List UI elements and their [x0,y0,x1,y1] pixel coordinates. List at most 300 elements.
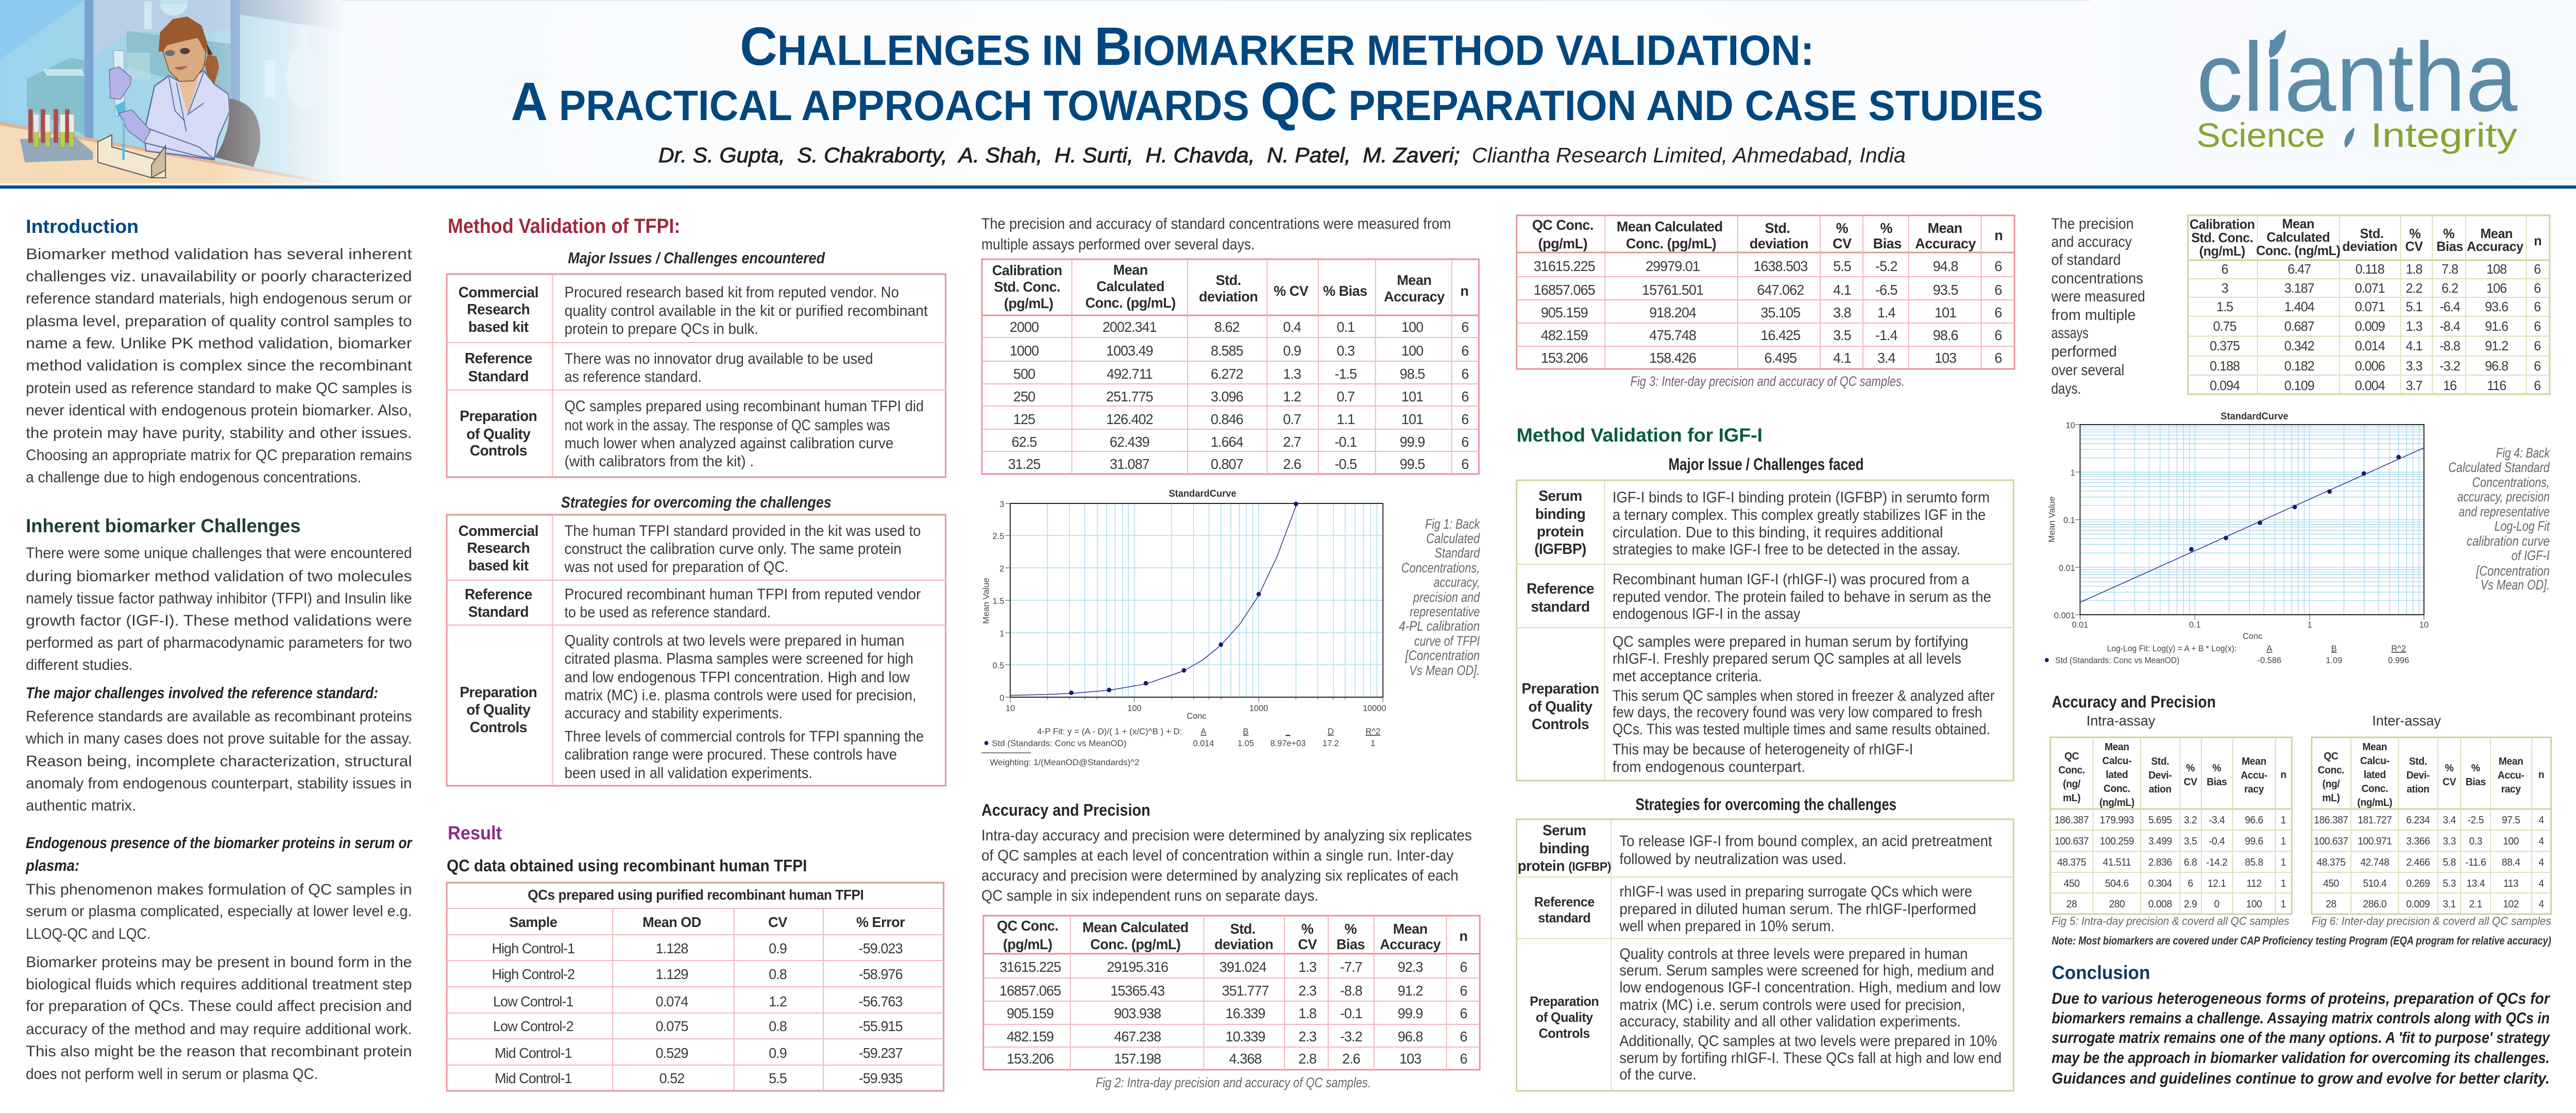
table: IGF-I calibration standards: 0.006 [2355,359,2385,374]
table: QC data: CV [768,914,788,930]
table: intra-assay IGF-I: 41.511 [2103,857,2131,868]
table: inter-day TFPI QC: 3.4 [1877,350,1895,366]
table: intra-assay IGF-I: lated [2106,769,2128,781]
chart: TFPI 4-PL standard curve: 3 [999,499,1004,509]
table: TFPI calibration standards: 2000 [1010,319,1039,335]
panel: column 1 introduction and challenges [25,215,413,1083]
table: inter-assay IGF-I: 3.1 [2443,899,2456,910]
table: inter-assay IGF-I: 450 [2323,878,2339,889]
table: intra-assay IGF-I: 1 [2281,836,2286,847]
table: intra-assay IGF-I: 0 [2214,899,2219,910]
table: inter-assay IGF-I: ation [2406,784,2429,795]
caption: figure 4: calibration curve [2467,533,2550,549]
table: intra-assay IGF-I: 2.9 [2184,899,2197,910]
text block: endogenous presence: LLOQ-QC and LQC. [26,925,150,942]
table: IGF-I calibration standards: 1.8 [2406,262,2422,277]
table: TFPI strategies [447,515,945,786]
table: intra-assay IGF-I: 3.2 [2184,815,2197,826]
table: inter-day TFPI QC: Accuracy [1915,235,1976,251]
text block: introduction [26,246,412,486]
heading: Accuracy and Precision: Accuracy and Precision [981,801,1150,819]
text block: inherent challenges: growth factor (IGF-I). These method validations were [26,612,412,629]
chart: TFPI 4-PL standard curve: R^2 [1366,727,1380,736]
table: TFPI strategies: been used in all validation experiments. [565,765,812,782]
logo: Cliantha Science Integrity: Science [2196,116,2325,154]
table: intra-assay IGF-I: racy [2244,784,2264,795]
table: TFPI strategies: Commercial [459,523,538,539]
illustration: scientist pipetting in a lab [0,0,342,185]
table: inter-day TFPI QC: Conc. (pg/mL) [1626,235,1716,251]
table: IGF-I issues: protein [1537,524,1584,540]
table: inter-assay IGF-I: 4 [2538,878,2544,889]
table: inter-assay IGF-I: % [2445,763,2453,774]
table: intra-assay IGF-I: (ng/ [2063,779,2081,790]
table: TFPI calibration standards: (pg/mL) [1004,295,1053,311]
caption: figure 1: representative [1410,604,1480,619]
caption: figure 4: Calculated Standard [2448,460,2550,475]
table: intra-assay IGF-I: QC [2064,751,2079,762]
logo: Cliantha Science Integrity: cliantha [2196,22,2517,132]
table: TFPI calibration standards: 6 [1461,411,1469,427]
table: TFPI strategies: of Quality [466,702,531,718]
table: IGF-I calibration standards: 5.1 [2406,300,2422,314]
table: intra-day TFPI QC: 6 [1460,959,1467,975]
table: inter-day TFPI QC: 6 [1994,327,2002,343]
table: TFPI issues: protein to prepare QCs in bulk. [565,321,758,338]
table: TFPI strategies: accuracy and stability experiments. [565,705,783,722]
table: intra-day TFPI QC: n [1459,928,1467,944]
table: inter-day TFPI QC: 16857.065 [1534,282,1595,298]
table: inter-day TFPI QC: -1.4 [1875,327,1897,343]
text block: inherent challenges: namely tissue factor pathway inhibitor (TFPI) and Insulin like [26,590,412,607]
table: inter-assay IGF-I: 181.727 [2358,815,2392,826]
caption: figure 4: [Concentration [2476,563,2550,579]
table: intra-assay IGF-I: 1 [2281,857,2286,868]
chart: IGF-I log-log standard curve: 1 [2307,620,2312,630]
table: TFPI strategies: and low endogenous TFPI concentration. High and low [565,669,910,686]
table: inter-assay IGF-I: 510.4 [2363,878,2387,889]
table: inter-assay IGF-I: 0.269 [2406,878,2430,889]
table: IGF-I calibration standards: Calibration [2190,217,2255,232]
table: inter-assay IGF-I: -2.5 [2468,815,2484,826]
table: IGF-I calibration standards: 6 [2534,281,2541,296]
text block: endogenous presence: Biomarker proteins may be present in bound form in the [26,954,412,971]
table: intra-assay IGF-I: 12.1 [2208,878,2226,889]
table: intra-assay IGF-I: 0.008 [2148,899,2172,910]
table: TFPI calibration standards: n [1460,283,1468,299]
table: TFPI strategies: Standard [468,604,529,620]
table: intra-assay IGF-I: 100 [2246,899,2262,910]
chart: TFPI 4-PL standard curve: 0 [999,693,1004,703]
table: IGF-I strategies: To release IGF-I from bound complex, an acid pretreatment [1619,833,1992,850]
table: TFPI calibration standards: 251.775 [1106,389,1153,404]
table: inter-day TFPI QC: 6 [1994,305,2002,321]
table: TFPI calibration standards: 1.2 [1283,389,1301,404]
table: TFPI calibration standards: 6 [1461,434,1469,450]
table: intra-day TFPI QC: 1.8 [1298,1005,1317,1021]
table: inter-day TFPI QC: 1638.503 [1753,258,1808,274]
table: intra-assay IGF-I: 1 [2281,815,2286,826]
table: QC data: Mean OD [642,914,701,930]
text block: standard precision intro: The precision and accuracy of standard concentrations were measured from [981,215,1451,232]
table: IGF-I calibration standards: 3.7 [2406,379,2422,393]
table: TFPI calibration standards: 250 [1013,389,1036,404]
table: inter-assay IGF-I: 5.3 [2443,878,2456,889]
table: intra-assay IGF-I: mL) [2063,792,2080,804]
table: QC data: Low Control-1 [493,993,573,1009]
table: inter-day TFPI QC: 29979.01 [1646,258,1700,274]
table: inter-assay IGF-I: (ng/ [2323,779,2340,790]
caption: figure 1: [Concentration [1405,648,1480,663]
caption: figure 1: Calculated [1426,531,1480,546]
table: inter-day TFPI QC: 103 [1935,350,1957,366]
text block: introduction: challenges viz. unavailability or poorly characterized [26,268,412,285]
table: TFPI issues: not work in the assay. The response of QC samples was [565,417,890,434]
table: IGF-I calibration standards: 0.014 [2355,339,2385,353]
table: IGF-I calibration standards: 0.004 [2355,379,2385,393]
table: TFPI strategies: based kit [468,558,529,574]
table: TFPI strategies: citrated plasma. Plasma samples were screened for high [565,650,913,667]
table: intra-assay IGF-I: 1 [2281,899,2286,910]
table: QC data: 0.9 [769,1045,787,1061]
table: IGF-I issues: from endogenous counterpart. [1613,758,1805,775]
table: intra-assay IGF-I: 280 [2109,899,2125,910]
table: IGF-I calibration standards: 3.187 [2284,281,2314,296]
table: IGF-I issues: reputed vendor. The protein failed to behave in serum as the [1613,588,1991,605]
text block: accuracy and precision: QC sample in six independent runs on separate days. [981,887,1318,904]
table: IGF-I calibration standards: 0.071 [2355,300,2385,314]
table: intra-day TFPI QC: 482.159 [1007,1028,1054,1044]
authors and affiliation [658,143,1906,167]
table: inter-day TFPI QC: 475.748 [1649,327,1697,343]
text block: endogenous presence: Endogenous presence of the biomarker proteins in serum or [26,834,413,852]
table: intra-day TFPI QC: 92.3 [1398,959,1423,975]
chart: TFPI 4-PL standard curve: 2 [999,564,1004,574]
table: QC data: -55.915 [859,1018,903,1034]
table: inter-assay IGF-I: 97.5 [2502,815,2520,826]
chart: IGF-I log-log standard curve: Std (Standards: Conc vs MeanOD) [2055,655,2179,665]
table: intra-day TFPI QC: 2.3 [1298,1028,1317,1044]
table: IGF-I calibration standards: Std. [2360,227,2383,241]
chart: IGF-I log-log standard curve: 0.1 [2189,620,2201,630]
text block: endogenous presence: plasma: [25,857,79,874]
table: TFPI calibration standards: Mean [1113,262,1148,278]
table: IGF-I strategies: accuracy, stability and all other validation experiments. [1619,1013,1961,1030]
table: intra-day TFPI QC: (pg/mL) [1003,936,1052,952]
table: QC data: -59.237 [859,1045,903,1061]
table: IGF-I issues: binding [1535,506,1585,522]
table: inter-assay IGF-I: 0.3 [2469,836,2482,847]
table: intra-day TFPI QC: % [1301,921,1313,937]
table: IGF-I calibration standards: 6 [2534,339,2541,353]
table: IGF-I calibration standards: 0.009 [2355,319,2385,334]
table: inter-day TFPI QC: Bias [1873,235,1902,251]
table: TFPI issues [447,274,945,477]
table: inter-day TFPI QC: 1.4 [1877,305,1895,321]
text block: accuracy and precision: Intra-day accuracy and precision were determined by analyzing six replicates [981,827,1472,844]
table: intra-day TFPI QC: 903.938 [1114,1005,1161,1021]
table: inter-day TFPI QC: Mean Calculated [1617,218,1723,234]
table: QC data: -58.976 [859,966,903,982]
table: IGF-I calibration standards: 1.404 [2284,300,2314,314]
table: IGF-I calibration standards: 0.342 [2284,339,2314,353]
table: IGF-I calibration standards: % [2443,227,2455,241]
title: A PRACTICAL APPROACH TOWARDS QC PREPARATION AND CASE STUDIES [511,71,2043,131]
table: inter-day TFPI QC: -5.2 [1875,258,1897,274]
table: IGF-I calibration standards: 6 [2534,379,2541,393]
table: inter-assay IGF-I: Mean [2363,741,2387,753]
table: TFPI strategies: The human TFPI standard provided in the kit was used to [565,522,921,539]
text block: IGF-I standard precision intro: were measured [2051,288,2145,305]
table: IGF-I calibration standards: 4.1 [2406,339,2422,353]
table: intra-assay IGF-I: -3.4 [2209,815,2225,826]
table: TFPI calibration standards: 0.9 [1283,343,1301,359]
table: IGF-I issues: Preparation [1522,681,1599,697]
table: inter-day TFPI QC: 98.6 [1933,327,1958,343]
table: IGF-I strategies: binding [1539,840,1589,857]
table: intra-assay IGF-I [2050,737,2292,914]
text block: IGF-I standard precision intro: The precision [2051,215,2134,232]
table: TFPI calibration standards: 126.402 [1106,411,1153,427]
table: IGF-I strategies: Additionally, QC samples at two levels were prepared in 10% [1619,1033,1997,1050]
table: IGF-I strategies: Preparation [1530,994,1599,1009]
table: IGF-I issues: rhIGF-I. Freshly prepared serum QC samples at all levels [1613,650,1961,667]
authors and affiliation: Dr. S. Gupta, S. Chakraborty, A. Shah, H. Surti, H. Chavda, N. Patel, M. Zaveri; [658,143,1460,167]
table: inter-assay IGF-I: 4 [2538,857,2544,868]
table: IGF-I issues: This may be because of heterogeneity of rhIGF-I [1613,741,1913,758]
table: intra-assay IGF-I: 85.8 [2245,857,2263,868]
table: IGF-I calibration standards: Bias [2436,240,2463,254]
table: IGF-I strategies: Reference [1534,895,1595,909]
table: intra-assay IGF-I: 6.8 [2184,857,2197,868]
table: IGF-I strategies: of Quality [1536,1010,1594,1025]
text block: inherent challenges: performed as part of pharmacodynamic parameters for two [26,634,412,651]
caption: figure 6: Fig 6: Inter-day precision & coverd all QC samples [2312,915,2551,927]
caption: figure 1: Concentrations, [1401,560,1480,576]
table: QC data: 5.5 [769,1070,787,1086]
text block: conclusion: Guidances and guidelines continue to grow and evolve for better clarity. [2052,1070,2550,1087]
table: intra-assay IGF-I: % [2186,763,2195,774]
table: IGF-I issues: met acceptance criteria. [1613,668,1762,685]
heading: Method Validation of TFPI: Method Validation of TFPI: [448,214,680,238]
table: TFPI calibration standards: 2002.341 [1103,319,1157,335]
heading: Accuracy and Precision IGF-I: Accuracy and Precision [2052,693,2216,711]
table: TFPI issues: There was no innovator drug available to be used [565,350,873,367]
table: intra-assay IGF-I: 6 [2188,878,2193,889]
table: inter-assay IGF-I: Bias [2466,777,2486,788]
table: IGF-I strategies: of the curve. [1619,1066,1697,1083]
table: IGF-I calibration standards: 0.182 [2284,359,2314,374]
table: TFPI calibration standards: Accuracy [1384,289,1445,305]
table: TFPI calibration standards: Std. Conc. [994,279,1060,295]
chart: TFPI 4-PL standard curve: 1.05 [1238,738,1254,748]
table: intra-assay IGF-I: 504.6 [2105,878,2129,889]
table: intra-assay IGF-I: Accu- [2241,770,2267,781]
table: TFPI issues: (with calibrators from the kit) . [565,453,754,470]
table: IGF-I strategies: standard [1538,911,1590,925]
table: QC data: Mid Control-1 [495,1070,572,1086]
table: inter-assay IGF-I: 3.366 [2406,836,2430,847]
table: intra-assay IGF-I: 99.6 [2245,836,2263,847]
table: intra-day TFPI QC: 351.777 [1222,983,1268,999]
table: IGF-I issues [1517,480,2013,781]
text block: IGF-I standard precision intro: days. [2051,380,2081,397]
table: TFPI calibration standards: 500 [1013,366,1036,382]
title: CHALLENGES IN BIOMARKER METHOD VALIDATION: [740,16,1814,76]
table: intra-day TFPI QC: 16857.065 [999,983,1061,999]
table: intra-assay IGF-I: % [2212,763,2221,774]
table: intra-assay IGF-I: n [2280,769,2286,781]
chart: TFPI 4-PL standard curve: 4-P Fit: y = (A - D)/( 1 + (x/C)^B ) + D: [1037,727,1182,736]
table: IGF-I calibration standards: 6 [2534,359,2541,374]
table: IGF-I strategies: followed by neutralization was used. [1619,851,1846,868]
table: intra-assay IGF-I: Std. [2151,756,2169,767]
caption: figure 5: Fig 5: Intra-day precision & coverd all QC samples [2052,915,2290,927]
table: TFPI calibration standards: 62.5 [1012,434,1037,450]
chart: TFPI 4-PL standard curve: Conc [1187,711,1207,721]
text block: reference standard challenge: Reason being, incomplete characterization, structural [26,753,412,770]
table: IGF-I calibration standards: (ng/mL) [2199,244,2245,259]
text block: IGF-I standard precision intro: and accuracy [2051,233,2132,250]
text block: inherent challenges: There were some unique challenges that were encountered [26,545,412,562]
table: inter-day TFPI QC: 6 [1994,258,2002,274]
subheading: IGF-I challenges: Major Issue / Challenges faced [1668,455,1863,474]
table: TFPI calibration standards [982,259,1479,474]
table: intra-day TFPI QC: 905.159 [1007,1005,1054,1021]
table: TFPI calibration standards: 6 [1461,343,1469,359]
table: intra-assay IGF-I: 3.5 [2184,836,2197,847]
text block: IGF-I standard precision intro [2051,215,2145,397]
table: IGF-I issues: (IGFBP) [1534,541,1586,558]
table: TFPI issues: of Quality [466,426,531,443]
table: inter-day TFPI QC: CV [1833,235,1852,251]
table: IGF-I issues: QCs. This was tested multiple times and same results obtained. [1613,721,1990,738]
table: intra-day TFPI QC: 153.206 [1007,1051,1054,1067]
title [511,16,2043,131]
chart: TFPI 4-PL standard curve: 100 [1127,703,1142,713]
table: inter-assay IGF-I: 100 [2503,836,2519,847]
table: IGF-I issues: a ternary complex. This complex greatly stabilizes IGF in the [1613,507,1986,524]
table: intra-day TFPI QC: Accuracy [1380,936,1441,952]
heading: Method Validation for IGF-I: Method Validation for IGF-I [1517,424,1762,446]
table: inter-day TFPI QC: 93.5 [1933,282,1958,298]
table: IGF-I issues: Recombinant human IGF-I (rhIGF-I) was procured from a [1613,571,1970,588]
table: intra-day TFPI QC: Mean Calculated [1082,919,1189,935]
table: TFPI calibration standards: 31.087 [1110,456,1149,472]
table: QC data: High Control-2 [492,966,574,982]
table: inter-day TFPI QC: 16.425 [1760,327,1801,343]
table: IGF-I calibration standards: 0.118 [2355,262,2385,277]
subheading: QC data: QC data obtained using recombinant human TFPI [447,856,807,875]
table: inter-assay IGF-I: Std. [2409,756,2427,767]
table: IGF-I calibration standards: 0.109 [2284,379,2314,393]
table: inter-assay IGF-I: 48.375 [2316,857,2346,868]
table: intra-assay IGF-I: Bias [2207,777,2227,788]
table: IGF-I calibration standards: 0.188 [2210,359,2240,374]
table: intra-assay IGF-I: 0.304 [2148,878,2172,889]
table: TFPI calibration standards: 101 [1401,411,1423,427]
table: QC data: 0.074 [656,993,688,1009]
table: IGF-I calibration standards: 7.8 [2442,262,2459,277]
table: intra-assay IGF-I: Devi- [2148,770,2172,781]
heading: Conclusion: Conclusion [2052,962,2150,983]
table: TFPI calibration standards: 2.7 [1283,434,1301,450]
text block: endogenous presence: serum or plasma complicated, especially at lower level e.g. [26,903,412,920]
table: IGF-I calibration standards: 6 [2534,319,2541,334]
caption: figure 1: accuracy, [1434,575,1480,590]
table: TFPI calibration standards: Std. [1216,272,1241,288]
table: intra-day TFPI QC: 4.368 [1229,1051,1262,1067]
table: TFPI calibration standards: -0.1 [1335,434,1357,450]
table: QC data: Mid Control-1 [495,1045,572,1061]
table: inter-assay IGF-I: Conc. [2362,783,2388,795]
text block: endogenous presence: This phenomenon makes formulation of QC samples in [26,881,412,898]
chart: TFPI 4-PL standard curve: 1 [999,629,1004,638]
table: TFPI strategies: Controls [470,719,527,736]
table: intra-day TFPI QC: 2.3 [1298,983,1317,999]
text block: endogenous presence [25,834,413,1083]
caption: figure 1: Fig 1: Back [1425,516,1481,532]
table: TFPI strategies: to be used as reference standard. [565,604,771,621]
table: IGF-I calibration standards: 1.5 [2216,300,2233,314]
table: TFPI calibration standards: 1.3 [1283,366,1301,382]
table: IGF-I calibration standards: -3.2 [2439,359,2460,374]
text block: accuracy and precision: accuracy and precision were determined by analyzing six replicates of each [981,867,1459,884]
table: intra-day TFPI QC: -7.7 [1340,959,1362,975]
table: inter-assay IGF-I: 6.234 [2406,815,2430,826]
chart: TFPI 4-PL standard curve: A [1201,727,1207,736]
text block: standard precision intro: multiple assays performed over several days. [981,236,1255,253]
table: inter-day TFPI QC: (pg/mL) [1538,235,1587,251]
table: inter-assay IGF-I: 4 [2538,836,2544,847]
table: IGF-I strategies: Quality controls at three levels were prepared in human [1619,946,1968,963]
table: TFPI issues: Commercial [459,284,538,301]
chart: IGF-I log-log standard curve: 10 [2419,620,2429,630]
table: IGF-I strategies: matrix (MC) i.e. serum controls were used for precision, [1619,997,1965,1014]
chart: TFPI 4-PL standard curve: 10 [1006,703,1015,713]
table: IGF-I calibration standards [2188,215,2550,394]
table: intra-assay IGF-I: 28 [2066,899,2077,910]
table: inter-day TFPI QC [1517,215,2014,369]
text block: reference standard challenge: anomaly from endogenous counterpart, stability issues in [26,775,412,792]
table: TFPI strategies: calibration range were procured. These controls have [565,746,897,763]
chart: IGF-I log-log standard curve: 0.01 [2072,620,2088,630]
table: TFPI calibration standards: 6 [1461,366,1469,382]
text block: inherent challenges [26,545,412,673]
table: IGF-I calibration standards: 0.375 [2210,339,2240,353]
text block: introduction: plasma level, preparation of quality control samples to [26,313,412,330]
text block: reference standard challenge: which in many cases does not prove suitable for the assay. [25,730,412,747]
chart: IGF-I log-log standard curve: Conc [2243,631,2262,641]
header banner [0,0,2576,189]
table: inter-assay IGF-I: CV [2443,777,2456,788]
table: inter-day TFPI QC: 153.206 [1541,350,1588,366]
chart: TFPI 4-PL standard curve: _ [1285,727,1291,736]
chart: TFPI 4-PL standard curve: 17.2 [1323,738,1339,748]
table: inter-day TFPI QC: 94.8 [1933,258,1958,274]
table: TFPI calibration standards: 101 [1401,389,1423,404]
table: QC data: Low Control-2 [493,1018,573,1034]
table: IGF-I issues: of Quality [1529,699,1592,715]
chart: TFPI 4-PL standard curve: Std (Standards: Conc vs MeanOD) [992,738,1127,748]
table: intra-assay IGF-I: 186.387 [2055,815,2089,826]
table: QC data: 1.2 [769,993,787,1009]
table: TFPI calibration standards: 0.4 [1283,319,1301,335]
table: intra-day TFPI QC: 6 [1460,1028,1467,1044]
table: inter-assay IGF-I: racy [2501,784,2521,795]
chart: IGF-I log-log standard curve: -0.586 [2258,655,2281,665]
table: inter-day TFPI QC: 647.062 [1757,282,1804,298]
